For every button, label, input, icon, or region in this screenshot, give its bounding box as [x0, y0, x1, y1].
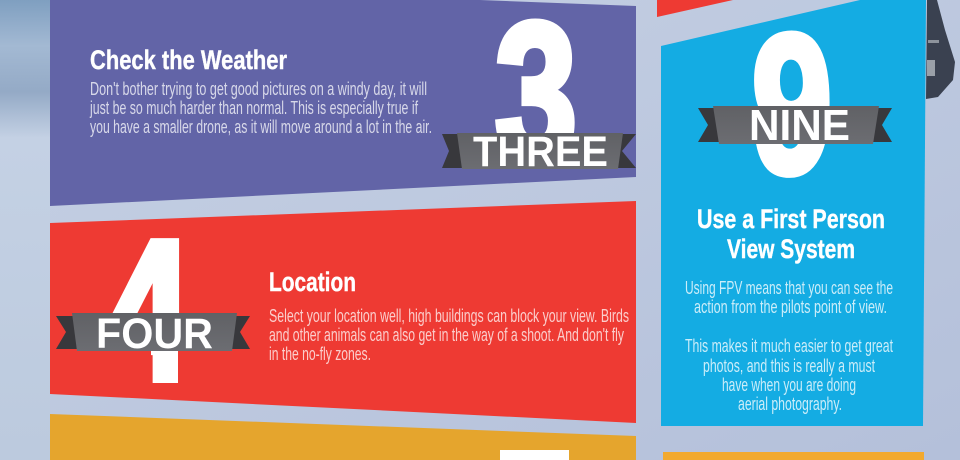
text: weather body: just be so much harder than normal. This is especially true if [89, 98, 419, 118]
ribbon: three: THREE [473, 128, 608, 176]
heading: check the weather: Check the Weather [90, 45, 287, 75]
text: weather body: you have a smaller drone, as it will move around a lot in the air. [90, 117, 432, 137]
ribbon: nine [698, 101, 892, 150]
text: weather body: Don't bother trying to get good pictures on a windy day, it will [90, 79, 427, 99]
text: fpv body [685, 278, 893, 414]
text: weather body [89, 79, 432, 137]
number 4: 4 [105, 200, 191, 422]
heading: use a first person view system [697, 204, 885, 264]
text: location body: Select your location well, high buildings can block your view. Birds [269, 306, 629, 326]
panel: check the weather [50, 0, 636, 206]
ribbon: four: FOUR [96, 310, 213, 358]
text: fpv body: have when you are doing [722, 375, 856, 395]
panel: location [50, 200, 636, 423]
text: fpv body: aerial photography. [738, 394, 842, 414]
text: location body [269, 306, 629, 364]
panel: first person view [661, 0, 926, 426]
heading: use a first person view system: Use a First Person [697, 204, 885, 234]
number 9: 9 [752, 0, 832, 214]
panel: bottom right yellow [663, 452, 924, 460]
panel: top right red corner [657, 0, 733, 17]
panel: fifth tip [50, 414, 636, 460]
heading: location: Location [269, 267, 356, 297]
text: location body: and other animals can also get in the way of a shoot. And don't fly [269, 325, 624, 345]
text: fpv body: photos, and this is really a must [703, 356, 875, 376]
number 5 [500, 450, 569, 460]
ribbon: nine: NINE [749, 101, 850, 150]
heading: use a first person view system: View System [727, 234, 855, 264]
drone silhouette [926, 0, 955, 99]
text: location body: in the no-fly zones. [269, 344, 371, 364]
ribbon: four [56, 310, 250, 358]
